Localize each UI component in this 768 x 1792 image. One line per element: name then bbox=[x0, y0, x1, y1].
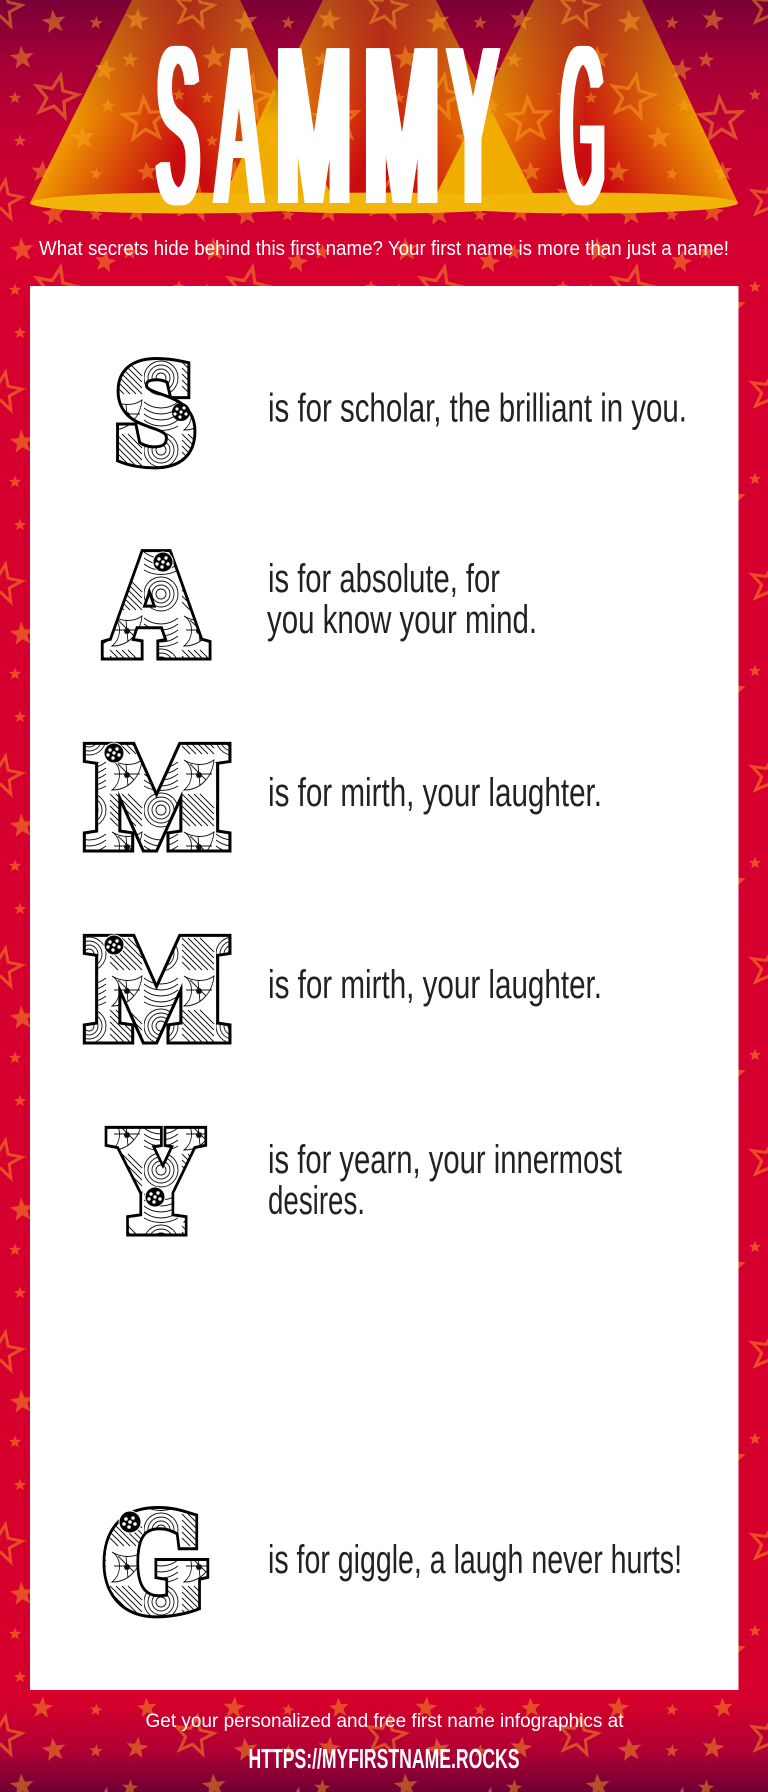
footer invitation text: Get your personalized and free first name infographics at bbox=[146, 1711, 624, 1732]
panel: white letters panel bbox=[30, 286, 738, 1690]
letter icon: G: G bbox=[104, 1482, 205, 1640]
text: A lines bbox=[267, 557, 537, 642]
text: M second line: is for mirth, your laughter. bbox=[268, 963, 602, 1007]
letter icon: M: M bbox=[89, 717, 227, 875]
letter icon: Y: Y bbox=[110, 1101, 202, 1259]
letter icon: A: A bbox=[108, 525, 204, 683]
spotlights bbox=[30, 0, 738, 214]
letter icon: Y: Y bbox=[110, 1101, 202, 1259]
text: Y lines bbox=[268, 1138, 622, 1223]
letter icon: S: S bbox=[117, 332, 194, 490]
text: Y lines: desires. bbox=[268, 1179, 365, 1223]
title: G bbox=[561, 0, 605, 250]
title: Y bbox=[449, 0, 497, 250]
title: S bbox=[157, 0, 198, 250]
letter icon: A: A bbox=[108, 525, 204, 683]
title: A bbox=[217, 0, 260, 250]
text: M line: is for mirth, your laughter. bbox=[268, 771, 602, 815]
title bbox=[155, 0, 605, 250]
text: A lines: you know your mind. bbox=[267, 598, 537, 642]
subtitle: What secrets hide behind this first name? Your first name is more than just a name! bbox=[39, 238, 729, 260]
text: Y lines: is for yearn, your innermost bbox=[268, 1138, 622, 1182]
title: M bbox=[277, 0, 350, 250]
letter icon: M second: M bbox=[89, 909, 227, 1067]
letter icon: G: G bbox=[104, 1482, 205, 1640]
footer url: HTTPS://MYFIRSTNAME.ROCKS bbox=[248, 1743, 520, 1774]
text: A lines: is for absolute, for bbox=[268, 557, 500, 601]
title: M bbox=[365, 0, 438, 250]
letter icon: M: M bbox=[89, 717, 227, 875]
letter icon: M second: M bbox=[89, 909, 227, 1067]
letter icon: S: S bbox=[117, 332, 194, 490]
